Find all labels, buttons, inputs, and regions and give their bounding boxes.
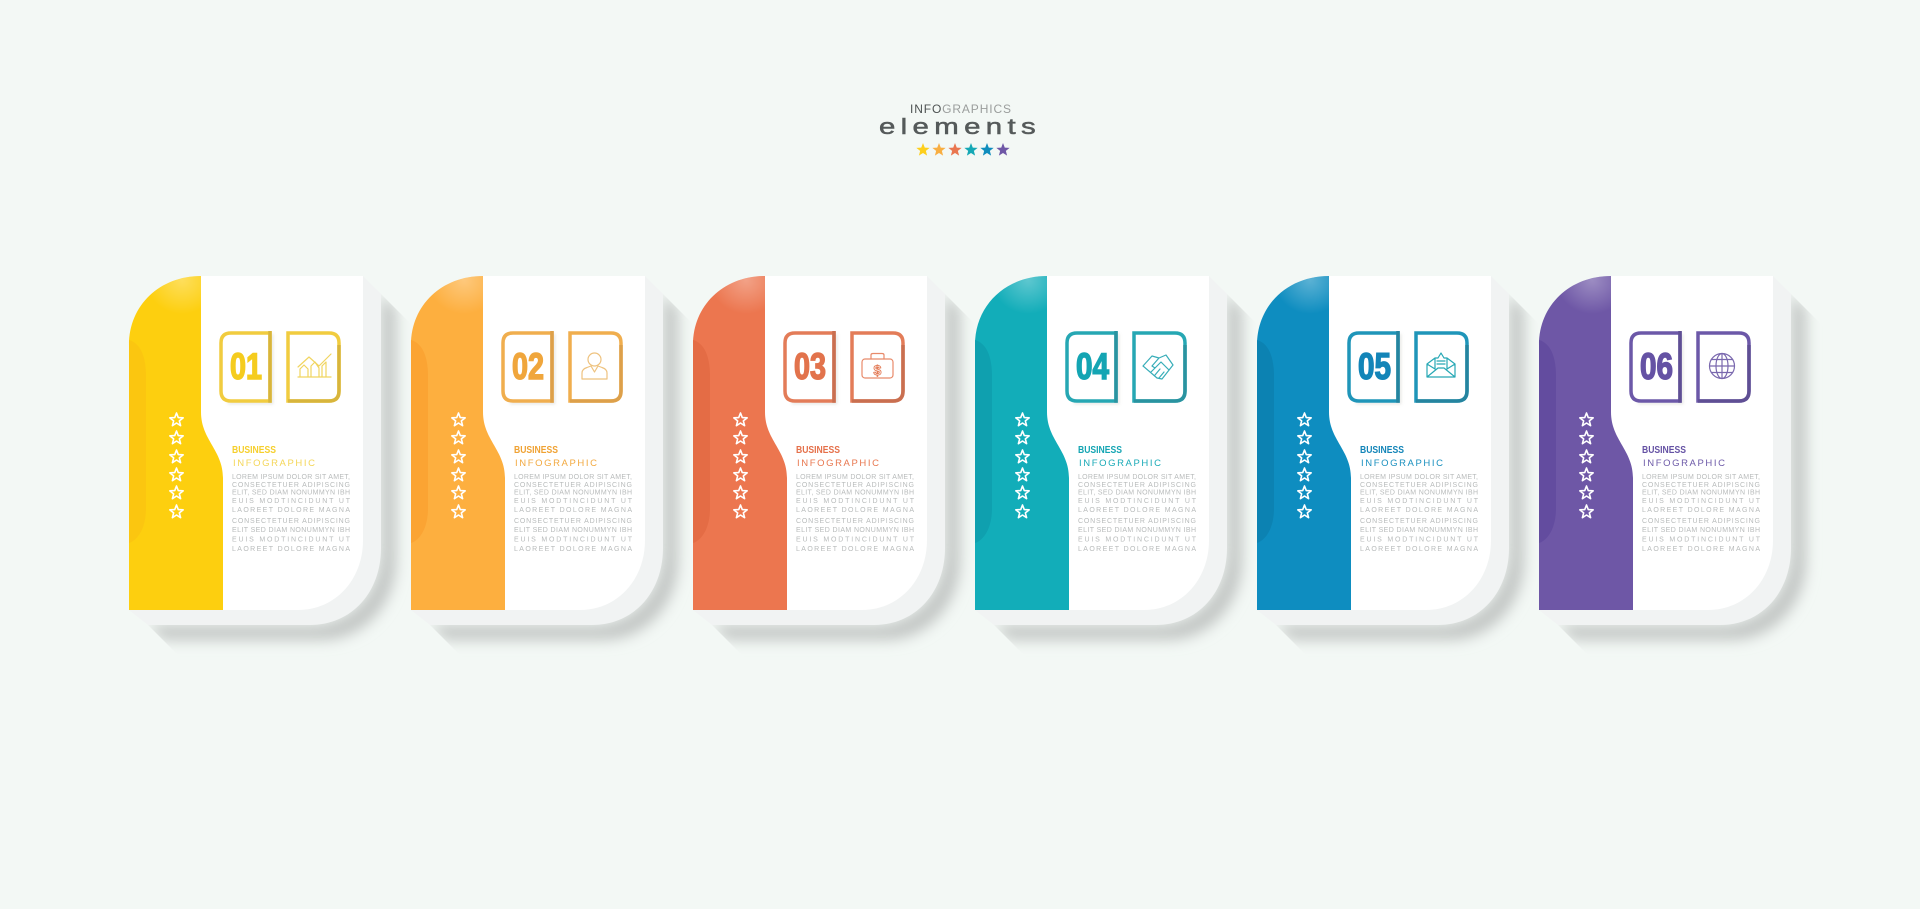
number box 04 [1067, 331, 1118, 403]
body text [514, 474, 633, 553]
body text: LAOREET DOLORE MAGNA [1360, 507, 1478, 514]
subheading: INFOGRAPHIC [1361, 458, 1443, 469]
number box 01: 01 [230, 346, 262, 387]
body text: ELIT, SED DIAM NONUMMYN IBH [1360, 490, 1478, 496]
icon box: globe [1698, 333, 1749, 403]
body text [1642, 474, 1761, 553]
stars [734, 413, 747, 518]
stars [170, 413, 183, 518]
subheading: INFOGRAPHIC [515, 458, 597, 469]
body text: CONSECTETUER ADIPISCING [1360, 482, 1478, 489]
body text: CONSECTETUER ADIPISCING [1642, 482, 1760, 489]
body text: LAOREET DOLORE MAGNA [1642, 507, 1760, 514]
body text: EUIS MODTINCIDUNT UT [514, 536, 633, 544]
subheading: INFOGRAPHIC [1079, 458, 1161, 469]
rating stars [916, 143, 1010, 156]
number box 06: 06 [1640, 346, 1673, 387]
icon box: money case [852, 333, 903, 403]
panel: step 05 [1257, 246, 1524, 640]
title [879, 102, 1041, 156]
body text: CONSECTETUER ADIPISCING [232, 518, 350, 525]
body text: LAOREET DOLORE MAGNA [232, 507, 350, 514]
body text: CONSECTETUER ADIPISCING [514, 482, 632, 489]
body text: CONSECTETUER ADIPISCING [796, 482, 914, 489]
panel: step 04 [975, 246, 1242, 640]
body text: LOREM IPSUM DOLOR SIT AMET, [1642, 474, 1760, 481]
number box 04: 04 [1076, 346, 1109, 387]
body text: LAOREET DOLORE MAGNA [796, 546, 914, 553]
body text: ELIT, SED DIAM NONUMMYN IBH [1642, 490, 1760, 496]
subheading: INFOGRAPHIC [233, 458, 315, 469]
heading: elements: elements [879, 114, 1041, 139]
panel: step 01 [129, 246, 396, 640]
stars [1016, 413, 1029, 518]
body text: EUIS MODTINCIDUNT UT [1360, 536, 1479, 544]
body text: EUIS MODTINCIDUNT UT [1642, 536, 1761, 544]
body text [1360, 474, 1479, 553]
body text: LAOREET DOLORE MAGNA [232, 546, 350, 553]
colored tab [129, 246, 223, 610]
body text: CONSECTETUER ADIPISCING [1078, 482, 1196, 489]
heading: BUSINESS [514, 444, 558, 456]
body text: ELIT SED DIAM NONUMMYN IBH [514, 527, 632, 534]
infographic canvas [128, 104, 1812, 646]
body text: EUIS MODTINCIDUNT UT [1360, 498, 1479, 505]
colored tab [693, 246, 787, 610]
body text: CONSECTETUER ADIPISCING [514, 518, 632, 525]
body text [232, 474, 351, 553]
body text: EUIS MODTINCIDUNT UT [514, 498, 633, 505]
body text: EUIS MODTINCIDUNT UT [796, 498, 915, 505]
body text: EUIS MODTINCIDUNT UT [232, 536, 351, 544]
stars [1580, 413, 1593, 518]
body text: LAOREET DOLORE MAGNA [1078, 546, 1196, 553]
body text: ELIT SED DIAM NONUMMYN IBH [1360, 527, 1478, 534]
body text: ELIT SED DIAM NONUMMYN IBH [1642, 527, 1760, 534]
subheading: INFOGRAPHIC [1643, 458, 1725, 469]
body text: EUIS MODTINCIDUNT UT [1078, 498, 1197, 505]
heading: BUSINESS [1078, 444, 1122, 456]
body text: ELIT, SED DIAM NONUMMYN IBH [796, 490, 914, 496]
body text [1078, 474, 1197, 553]
heading: BUSINESS [796, 444, 840, 456]
body text: EUIS MODTINCIDUNT UT [1642, 498, 1761, 505]
body text: ELIT SED DIAM NONUMMYN IBH [232, 527, 350, 534]
body text: ELIT SED DIAM NONUMMYN IBH [796, 527, 914, 534]
panel: step 02 [411, 246, 678, 640]
body text: LOREM IPSUM DOLOR SIT AMET, [232, 474, 350, 481]
icon box: handshake [1134, 333, 1185, 403]
heading: BUSINESS [1360, 444, 1404, 456]
body text: LAOREET DOLORE MAGNA [1078, 507, 1196, 514]
body text [796, 474, 915, 553]
number box 03 [785, 331, 836, 403]
colored tab [1257, 246, 1351, 610]
body text: LOREM IPSUM DOLOR SIT AMET, [1360, 474, 1478, 481]
body text: LAOREET DOLORE MAGNA [796, 507, 914, 514]
body text: ELIT, SED DIAM NONUMMYN IBH [1078, 490, 1196, 496]
number box 05: 05 [1358, 346, 1391, 387]
body text: EUIS MODTINCIDUNT UT [1078, 536, 1197, 544]
number box 01 [221, 331, 272, 403]
body text: EUIS MODTINCIDUNT UT [796, 536, 915, 544]
body text: LAOREET DOLORE MAGNA [514, 507, 632, 514]
body text: LOREM IPSUM DOLOR SIT AMET, [796, 474, 914, 481]
number box 02 [503, 331, 554, 403]
stars [1298, 413, 1311, 518]
icon box: money case: $ [874, 362, 882, 378]
body text: LAOREET DOLORE MAGNA [1642, 546, 1760, 553]
number box 05 [1349, 331, 1400, 403]
stars [452, 413, 465, 518]
body text: ELIT SED DIAM NONUMMYN IBH [1078, 527, 1196, 534]
body text: CONSECTETUER ADIPISCING [1360, 518, 1478, 525]
icon box: person [570, 333, 621, 403]
body text: ELIT, SED DIAM NONUMMYN IBH [232, 490, 350, 496]
body text: LOREM IPSUM DOLOR SIT AMET, [1078, 474, 1196, 481]
body text: LAOREET DOLORE MAGNA [514, 546, 632, 553]
body text: CONSECTETUER ADIPISCING [232, 482, 350, 489]
panel: step 03 [693, 246, 960, 640]
colored tab [411, 246, 505, 610]
icon box: chart [288, 333, 339, 403]
icon box: envelope [1416, 333, 1467, 403]
panel: step 06 [1539, 246, 1806, 640]
number box 02: 02 [512, 346, 544, 387]
number box 03: 03 [794, 346, 826, 387]
heading: BUSINESS [1642, 444, 1686, 456]
colored tab [975, 246, 1069, 610]
heading: BUSINESS [232, 444, 276, 456]
body text: CONSECTETUER ADIPISCING [796, 518, 914, 525]
body text: CONSECTETUER ADIPISCING [1078, 518, 1196, 525]
subheading: INFOGRAPHIC [797, 458, 879, 469]
heading: infographics: INFOGRAPHICS [910, 102, 1011, 116]
number box 06 [1631, 331, 1682, 403]
colored tab [1539, 246, 1633, 610]
body text: CONSECTETUER ADIPISCING [1642, 518, 1760, 525]
body text: ELIT, SED DIAM NONUMMYN IBH [514, 490, 632, 496]
body text: LOREM IPSUM DOLOR SIT AMET, [514, 474, 632, 481]
body text: EUIS MODTINCIDUNT UT [232, 498, 351, 505]
body text: LAOREET DOLORE MAGNA [1360, 546, 1478, 553]
